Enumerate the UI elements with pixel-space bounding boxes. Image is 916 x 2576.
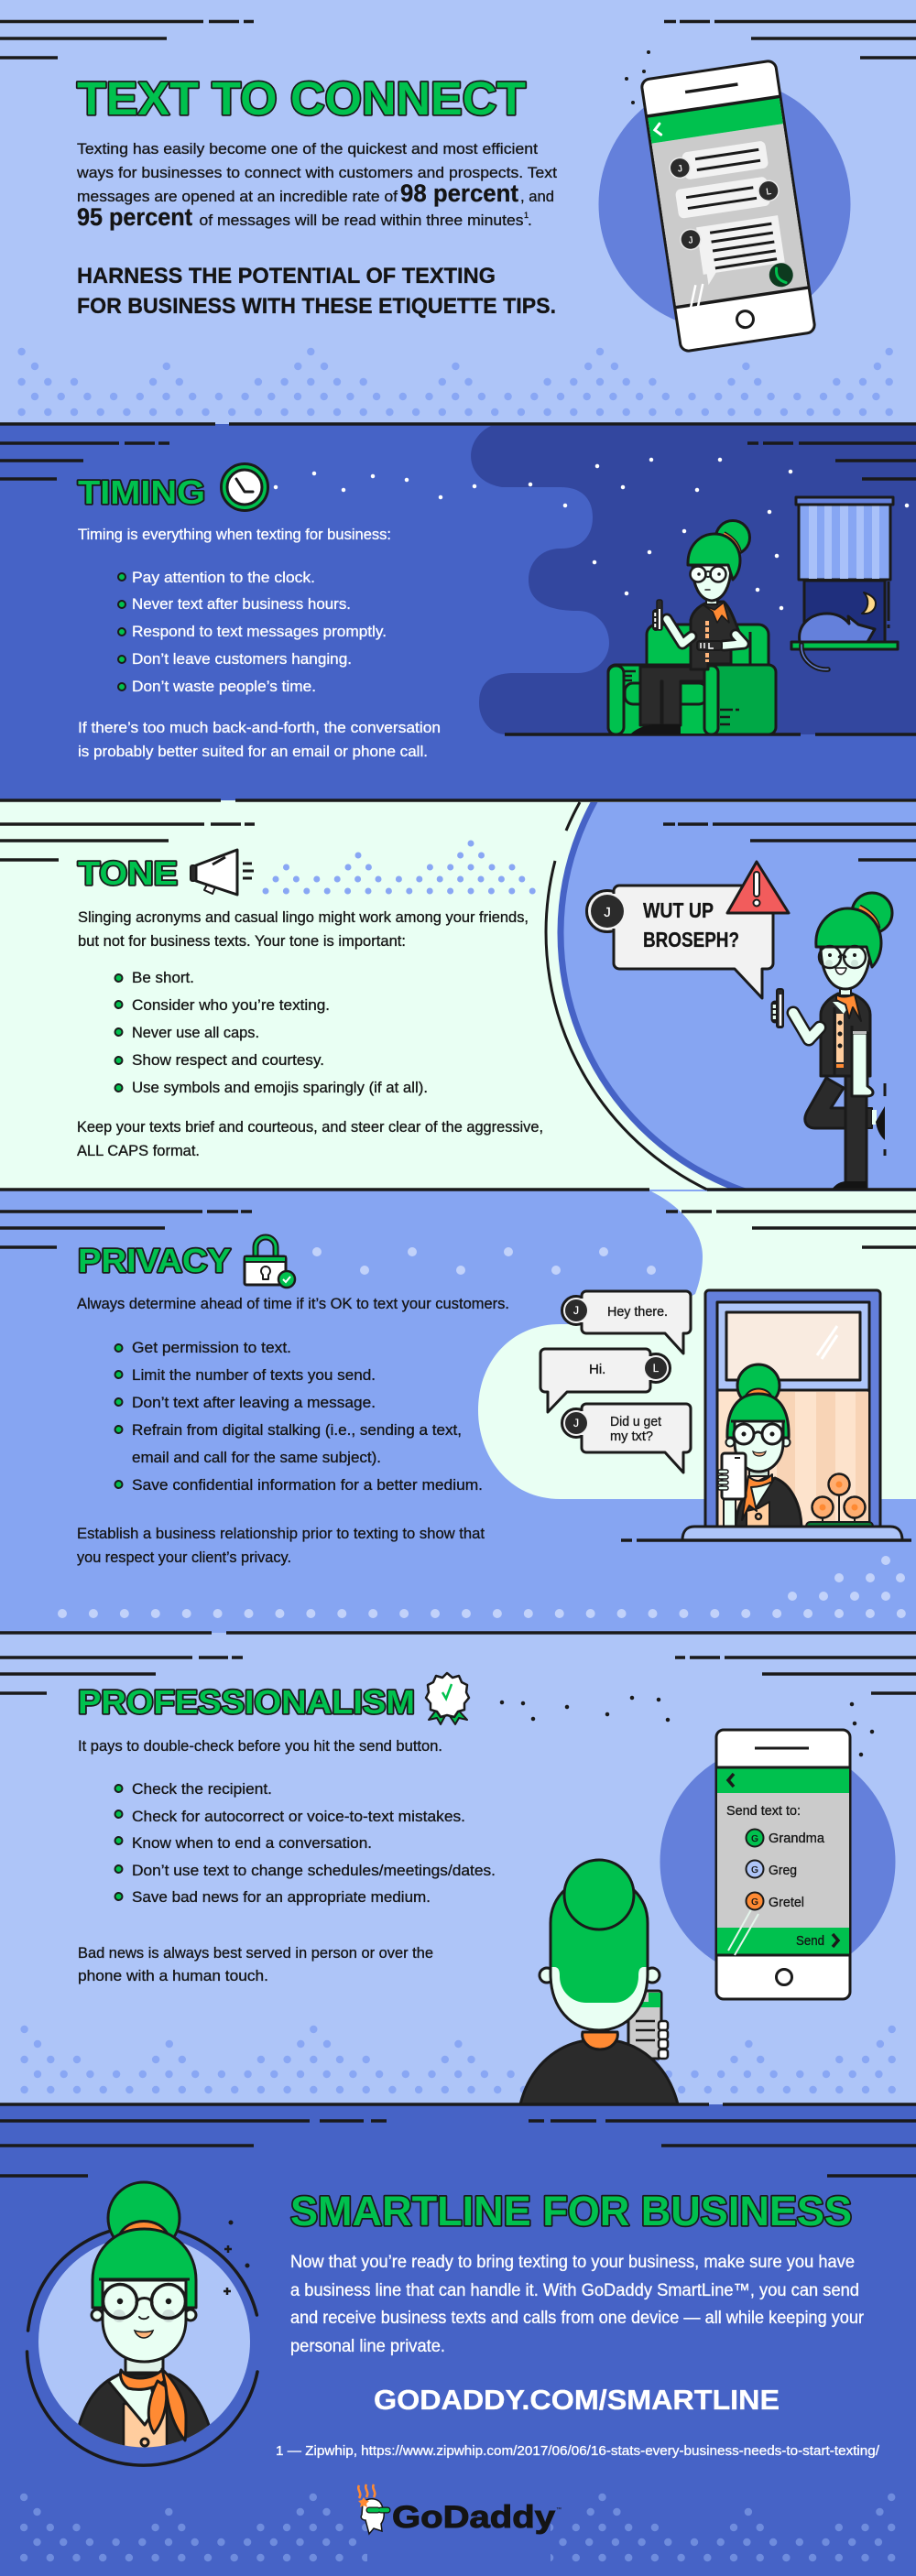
paragraph: personal line private.: [290, 2337, 445, 2356]
subheading: [77, 264, 556, 319]
paragraph: [290, 2253, 865, 2356]
text: timing: Pay attention to the clock.: [132, 569, 315, 586]
text: tone: but not for business texts. Your tone is important:: [78, 932, 406, 950]
text: professionalism: phone with a human touch.: [78, 1967, 268, 1984]
illustration: phone contact list: Gretel: [769, 1895, 804, 1910]
illustration: phone contact list: Send: [796, 1933, 824, 1949]
illustration: phone on circle: L: [766, 187, 772, 198]
text: tone: Slinging acronyms and casual lingo might work among your friends,: [78, 908, 529, 926]
illustration: woman on armchair: [608, 520, 776, 734]
illustration: phone contact list: G: [751, 1865, 758, 1875]
text: privacy: Limit the number of texts you send.: [132, 1366, 376, 1384]
speech bubble: hi: [540, 1349, 671, 1412]
text: timing: Never text after business hours.: [132, 595, 351, 613]
text: privacy: email and call for the same subject).: [132, 1449, 381, 1466]
heading: PRIVACY: [78, 1242, 231, 1279]
icon: award badge: [426, 1673, 469, 1724]
text: privacy: [77, 1295, 509, 1566]
illustration: standing woman: [775, 893, 892, 1190]
text: timing: If there’s too much back-and-forth, the conversation: [78, 719, 441, 736]
text: timing: is probably better suited for an email or phone call.: [78, 743, 428, 760]
speech bubble: hi: Hi.: [589, 1362, 605, 1377]
title: TEXT TO CONNECT: [77, 72, 526, 125]
paragraph: and receive business texts and calls from one device — all while keeping your: [290, 2309, 865, 2328]
paragraph: a business line that can handle it. With GoDaddy SmartLine™, you can send: [290, 2281, 859, 2300]
icon: warning triangle: [727, 862, 789, 913]
speech bubble: wut up broseph: J: [604, 905, 611, 920]
intro paragraph: [76, 140, 557, 231]
text: privacy: Establish a business relationship prior to texting to show that: [77, 1525, 485, 1542]
arc backdrop: [544, 802, 916, 1190]
heading: PROFESSIONALISM: [78, 1683, 415, 1721]
text: professionalism: Check the recipient.: [132, 1780, 272, 1798]
illustration: phone contact list: G: [751, 1834, 758, 1844]
panel: timing: [0, 426, 916, 800]
panel: intro: [0, 22, 916, 424]
speech bubble: hey there: Hey there.: [607, 1304, 668, 1320]
illustration: phone contact list: Grandma: [769, 1831, 825, 1846]
icon: clock: [222, 463, 267, 511]
speech bubble: wut up broseph: [586, 886, 773, 998]
text: privacy: you respect your client’s privacy.: [77, 1549, 291, 1566]
text: professionalism: Save bad news for an appropriate medium.: [132, 1888, 431, 1906]
icon: padlock: [245, 1237, 295, 1288]
speech bubble: did u get my txt: Did u get: [610, 1414, 662, 1429]
text: tone: Keep your texts brief and courteous, and steer clear of the aggressive,: [77, 1118, 543, 1136]
speech bubble: wut up broseph: WUT UP: [643, 898, 714, 922]
panel: tone: [0, 802, 916, 1191]
dots: [62, 1252, 907, 1614]
logo: GoDaddy: ™: [556, 2506, 562, 2513]
speech bubble: hey there: J: [573, 1304, 579, 1317]
intro paragraph: , and: [520, 188, 554, 205]
intro paragraph: 98 percent: [400, 179, 518, 207]
illustration: phone on circle: J: [688, 235, 693, 246]
text: timing: Don’t leave customers hanging.: [132, 650, 352, 668]
footnote: 1 — Zipwhip, https://www.zipwhip.com/2017/06/06/16-stats-every-business-needs-to-start-texting/: [276, 2443, 880, 2459]
text: tone: Show respect and courtesy.: [132, 1051, 324, 1069]
intro paragraph: of messages will be read within three minutes: [200, 212, 524, 229]
subheading: FOR BUSINESS WITH THESE ETIQUETTE TIPS.: [77, 294, 556, 319]
icon: megaphone: [191, 850, 254, 895]
intro paragraph: messages are opened at an incredible rate of: [77, 188, 398, 205]
illustration: phone on circle: J: [677, 164, 683, 175]
text: privacy: Save confidential information for a better medium.: [132, 1476, 483, 1494]
illustration: phone contact list: Greg: [769, 1863, 797, 1878]
panel: privacy: [0, 1191, 916, 1633]
text: tone: ALL CAPS format.: [77, 1142, 200, 1159]
illustration: phone contact list: Send text to:: [726, 1803, 801, 1819]
panel: smartline: [0, 2121, 916, 2564]
paragraph: Now that you’re ready to bring texting to your business, make sure you have: [290, 2253, 855, 2272]
text: professionalism: Don’t use text to change schedules/meetings/dates.: [132, 1862, 496, 1879]
text: timing: Timing is everything when texting for business:: [78, 526, 391, 543]
subheading: HARNESS THE POTENTIAL OF TEXTING: [77, 264, 496, 288]
intro paragraph: 1: [524, 211, 529, 220]
text: privacy: Get permission to text.: [132, 1339, 291, 1356]
night sky blob: [471, 426, 916, 734]
speech bubble: did u get my txt: my txt?: [610, 1429, 653, 1444]
speech bubble: hi: L: [653, 1362, 660, 1375]
text: tone: Be short.: [132, 969, 194, 986]
panel: professionalism: [0, 1658, 916, 2104]
call to action url: GODADDY.COM/SMARTLINE: [374, 2384, 780, 2416]
illustration: woman from behind: [520, 1860, 678, 2104]
text: privacy: Don’t text after leaving a message.: [132, 1394, 376, 1411]
text: professionalism: It pays to double-check before you hit the send button.: [78, 1737, 442, 1755]
intro paragraph: ways for businesses to connect with customers and prospects. Text: [76, 164, 557, 181]
speech bubble: wut up broseph: BROSEPH?: [643, 928, 739, 951]
text: privacy: Always determine ahead of time if it’s OK to text your customers.: [77, 1295, 509, 1312]
text: professionalism: Check for autocorrect or voice-to-text mistakes.: [132, 1808, 465, 1825]
bullets: tone: [115, 974, 123, 1092]
text: timing: [78, 526, 441, 760]
text: tone: Never use all caps.: [132, 1024, 259, 1041]
text: professionalism: Know when to end a conversation.: [132, 1834, 372, 1852]
text: timing: Don’t waste people’s time.: [132, 678, 316, 695]
illustration: woman portrait: [27, 2182, 257, 2465]
text: privacy: Refrain from digital stalking (i.e., sending a text,: [132, 1421, 462, 1439]
logo: GoDaddy: GoDaddy: [392, 2500, 555, 2535]
text: timing: Respond to text messages promptly.: [132, 623, 387, 640]
dots: [266, 843, 536, 891]
bullets: professionalism: [115, 1785, 123, 1900]
text: tone: [77, 908, 543, 1159]
logo: GoDaddy: [358, 2484, 562, 2535]
illustration: window and cat: [791, 497, 898, 669]
title: SMARTLINE FOR BUSINESS: [290, 2188, 852, 2234]
text: professionalism: Bad news is always best served in person or over the: [78, 1944, 433, 1962]
bullets: timing: [118, 573, 125, 690]
text: tone: Use symbols and emojis sparingly (if at all).: [132, 1079, 428, 1096]
text: tone: Consider who you’re texting.: [132, 996, 330, 1014]
speech bubble: did u get my txt: [562, 1404, 691, 1473]
bullets: privacy: [115, 1344, 123, 1488]
pale blob backdrop: [478, 1191, 916, 1499]
illustration: phone contact list: G: [751, 1897, 758, 1908]
illustration: phone on circle: [599, 52, 850, 352]
heading: TONE: [78, 854, 178, 892]
illustration: woman in window: [621, 1290, 911, 1540]
intro paragraph: Texting has easily become one of the quickest and most efficient: [77, 140, 538, 158]
intro paragraph: 95 percent: [77, 203, 192, 231]
heading: TIMING: [78, 473, 205, 511]
speech bubble: did u get my txt: J: [573, 1417, 579, 1429]
intro paragraph: .: [528, 212, 532, 229]
text: professionalism: [78, 1737, 496, 1984]
illustration: phone contact list: [660, 1730, 896, 1999]
speech bubble: hey there: [562, 1291, 691, 1353]
